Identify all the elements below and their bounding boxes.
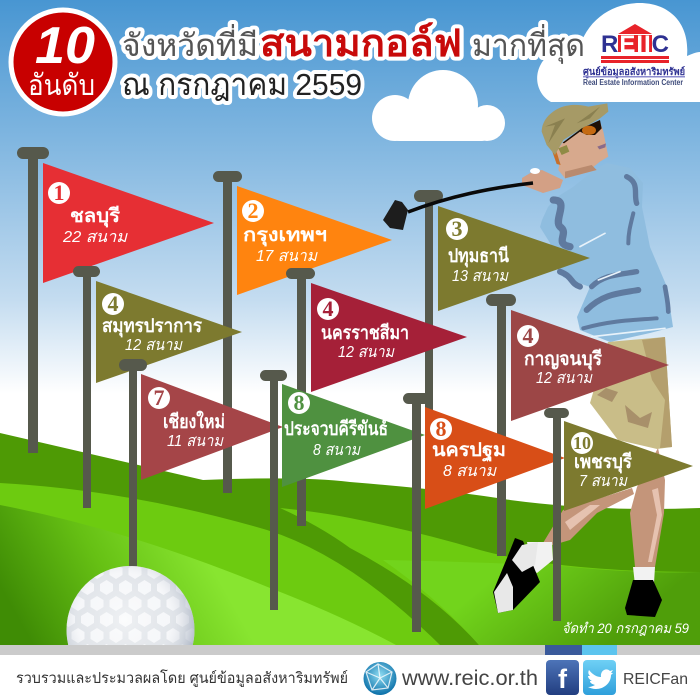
cap details (545, 107, 600, 143)
lips (597, 143, 606, 149)
title: มากที่สุด (472, 24, 585, 65)
shoe highlights (494, 542, 538, 613)
flag 8: ประจวบคีรีขันธ์: ประจวบคีรีขันธ์ (284, 418, 388, 440)
neck and face (555, 122, 608, 178)
shorts (590, 337, 672, 449)
title: จังหวัดที่มี (122, 24, 258, 63)
flag 8: ประจวบคีรีขันธ์: 8 (294, 390, 304, 415)
icon: facebook: f (558, 664, 568, 694)
icon: globe (364, 662, 396, 695)
shoe: front foot (625, 580, 662, 617)
golfer illustration (493, 103, 673, 617)
flag 4: กาญจนบุรี (486, 294, 669, 556)
logo: REIC: ศูนย์ข้อมูลอสังหาริมทรัพย์ (583, 66, 685, 79)
footer credit: รวบรวมและประมวลผลโดย ศูนย์ข้อมูลอสังหาริมทรัพย์ (16, 669, 348, 687)
front leg (630, 448, 665, 567)
flag 8: นครปฐม (403, 393, 565, 632)
flag 2: กรุงเทพฯ: 2 (248, 198, 258, 223)
icon: facebook (546, 660, 579, 695)
badge: 10 อันดับ: อันดับ (28, 70, 95, 102)
badge: 10 อันดับ (11, 10, 115, 114)
flag 4: นครราชสีมา: นครราชสีมา (321, 322, 409, 344)
flag 2: กรุงเทพฯ: 17 สนาม (256, 248, 318, 265)
website: www.reic.or.th (401, 667, 538, 690)
cap (542, 103, 608, 155)
flag 2: กรุงเทพฯ (213, 171, 392, 493)
flag 4: สมุทรปราการ (73, 266, 242, 508)
flag 4: กาญจนบุรี: 12 สนาม (536, 370, 593, 387)
flag 4: สมุทรปราการ: 12 สนาม (125, 337, 183, 354)
icon: twitter (583, 660, 616, 695)
flag 3: ปทุมธานี: 13 สนาม (452, 268, 509, 285)
flag 4: กาญจนบุรี: กาญจนบุรี (524, 348, 603, 371)
flag 7: เชียงใหม่ (119, 359, 283, 572)
flag 8: ประจวบคีรีขันธ์ (260, 370, 425, 610)
socks (527, 542, 655, 585)
neck shadow (565, 165, 597, 178)
golf club (383, 183, 533, 230)
cloud: middle (372, 70, 505, 141)
shirt (540, 163, 673, 342)
flag 2: กรุงเทพฯ: กรุงเทพฯ (243, 225, 327, 247)
flag 1: ชลบุรี: 22 สนาม (62, 229, 128, 246)
logo: REIC (583, 24, 685, 87)
flag 10: เพชรบุรี: 7 สนาม (579, 473, 628, 490)
glove cuff (530, 168, 540, 174)
flag 3: ปทุมธานี (414, 190, 590, 483)
flag 10: เพชรบุรี: เพชรบุรี (574, 451, 633, 474)
golf ball (66, 566, 194, 645)
flag 8: ประจวบคีรีขันธ์: 8 สนาม (313, 442, 361, 459)
flag 1: ชลบุรี: 1 (54, 180, 64, 205)
flag 4: นครราชสีมา: 4 (322, 296, 334, 321)
flag 1: ชลบุรี (17, 147, 214, 453)
sunglass lens (582, 126, 596, 135)
logo: REIC: REIIC (601, 31, 669, 58)
flag 7: เชียงใหม่: 7 (154, 385, 164, 410)
flag 7: เชียงใหม่: 11 สนาม (167, 433, 224, 450)
ear (558, 145, 569, 155)
leg highlights (565, 488, 662, 562)
flag 8: นครปฐม: นครปฐม (432, 440, 506, 463)
title: สนามกอล์ฟ (260, 22, 462, 65)
flag 10: เพชรบุรี (544, 408, 693, 621)
badge: 10 อันดับ: 10 (35, 17, 95, 75)
flag 10: เพชรบุรี: 10 (573, 433, 591, 453)
head (542, 103, 608, 178)
hand (522, 170, 563, 193)
logo: REIC: Real Estate Information Center (583, 78, 683, 87)
shoe: back foot (493, 538, 540, 613)
title: ณ กรกฎาคม 2559 (122, 67, 362, 102)
flag 4: นครราชสีมา (286, 268, 467, 526)
title (122, 22, 585, 102)
footer band (0, 645, 700, 700)
back leg (543, 488, 634, 545)
flag 8: นครปฐม: 8 (436, 416, 446, 441)
facebook name: REICFan (623, 671, 688, 688)
cloud: logo backing (537, 3, 700, 102)
flag 3: ปทุมธานี: 3 (452, 216, 462, 241)
golf course hills (0, 433, 700, 645)
flag 4: สมุทรปราการ: สมุทรปราการ (102, 316, 203, 338)
hair (552, 150, 561, 165)
flag 3: ปทุมธานี: ปทุมธานี (448, 245, 509, 268)
flag 8: นครปฐม: 8 สนาม (443, 463, 497, 480)
flag 4: นครราชสีมา: 12 สนาม (338, 344, 395, 361)
flag 4: กาญจนบุรี: 4 (522, 323, 534, 348)
flag 7: เชียงใหม่: เชียงใหม่ (163, 410, 225, 433)
flag 4: สมุทรปราการ: 4 (108, 291, 118, 316)
flag 1: ชลบุรี: ชลบุรี (70, 205, 121, 228)
date note: จัดทำ 20 กรกฎาคม 59 (562, 620, 689, 636)
sunglasses (563, 120, 602, 143)
